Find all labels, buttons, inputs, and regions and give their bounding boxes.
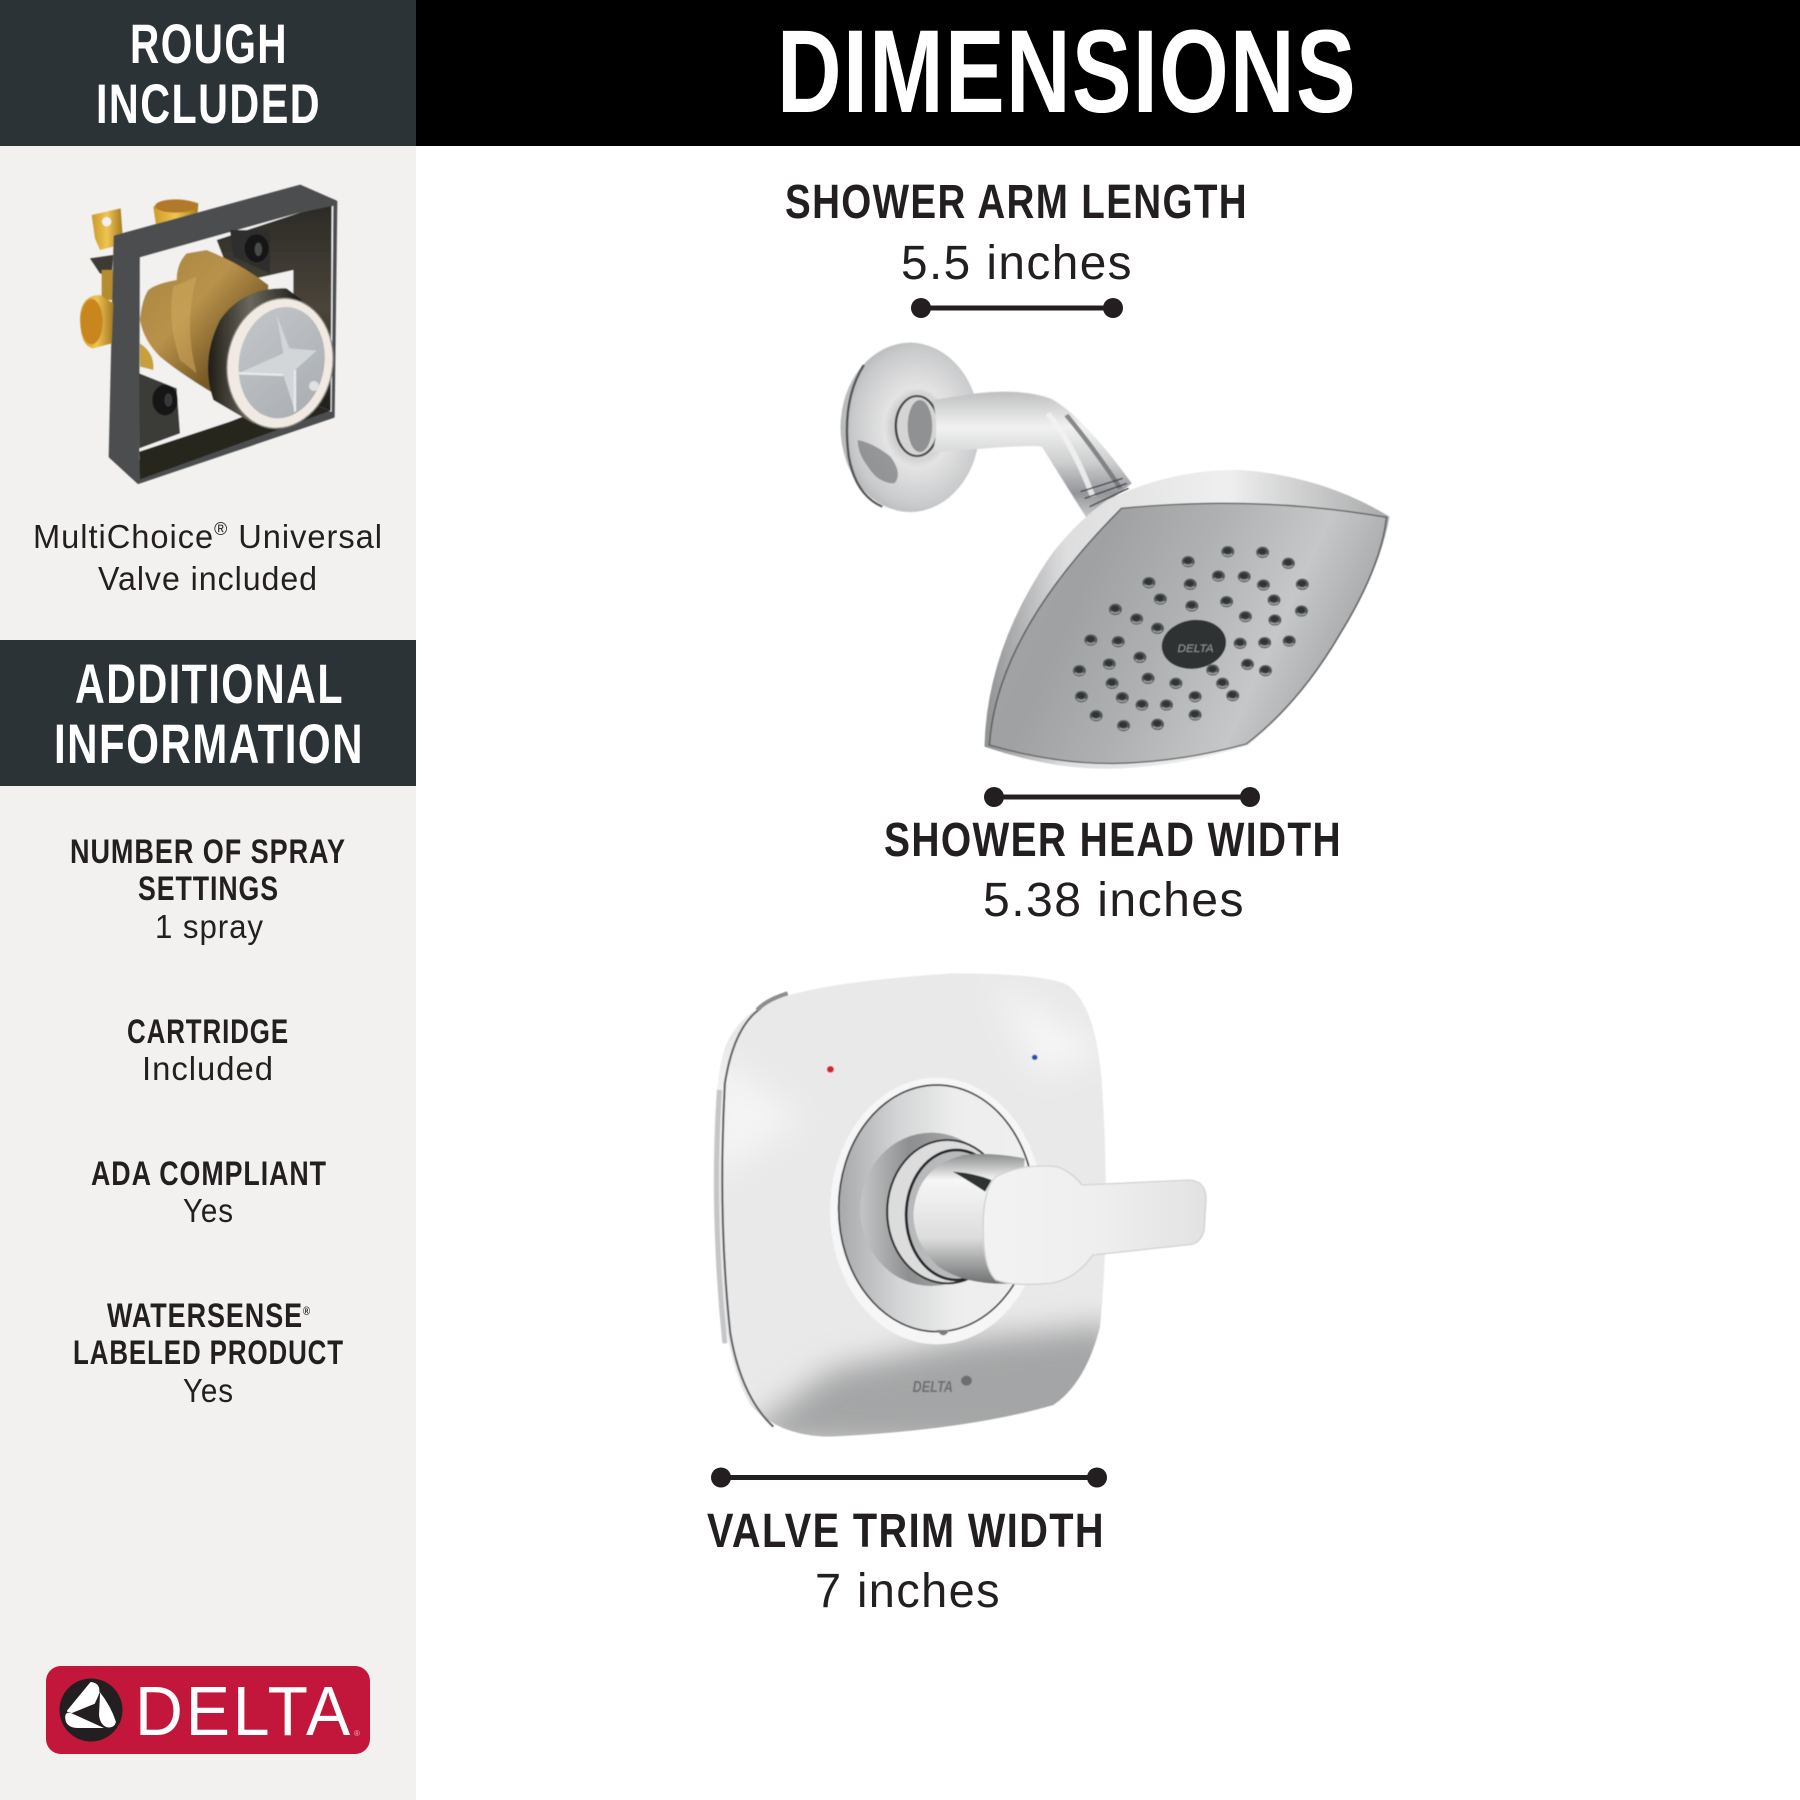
title banner: dimensions xyxy=(416,0,1800,146)
dimension bar: shower arm xyxy=(911,298,1123,318)
measurement: shower arm length: 5.5 inches xyxy=(901,237,1133,290)
arm xyxy=(932,392,1132,518)
brand logo: delta: DELTA xyxy=(135,1672,353,1750)
spec: watersense labeled product: WATERSENSE xyxy=(107,1297,354,1335)
flange xyxy=(841,343,980,512)
heading: additional information: ADDITIONAL xyxy=(75,652,344,715)
measurement: valve trim width: 7 inches xyxy=(815,1565,1001,1618)
brass body xyxy=(140,250,268,393)
spec: watersense labeled product: ® xyxy=(303,1304,311,1318)
spec: watersense labeled product: LABELED PRODUCT xyxy=(73,1334,344,1372)
measurement: shower head width: 5.38 inches xyxy=(983,874,1245,927)
centre badge xyxy=(1152,611,1236,677)
caption: valve included: Valve included xyxy=(98,560,318,597)
spec: number of spray settings: SETTINGS xyxy=(138,870,279,908)
measurement: shower arm length: SHOWER ARM LENGTH xyxy=(785,176,1248,229)
spec: cartridge xyxy=(127,1013,289,1087)
measurement: shower head width xyxy=(884,814,1342,927)
spec: ada compliant xyxy=(91,1155,327,1229)
brand logo: delta: ® xyxy=(354,1729,360,1738)
product photo: shower head and arm xyxy=(841,343,1389,769)
dimension bar: valve trim xyxy=(711,1468,1107,1488)
head body xyxy=(984,470,1389,769)
brand logo: delta xyxy=(46,1666,370,1754)
product photo: rough-in valve xyxy=(80,186,343,483)
trim plate xyxy=(713,973,1106,1437)
measurement: valve trim width: VALVE TRIM WIDTH xyxy=(707,1505,1105,1558)
spec: ada compliant: ADA COMPLIANT xyxy=(91,1155,327,1193)
frame xyxy=(110,186,336,483)
heading: rough included: ROUGH xyxy=(130,12,288,75)
spec: number of spray settings xyxy=(70,833,346,945)
spec: watersense labeled product: Yes xyxy=(183,1372,234,1409)
heading: rough included: INCLUDED xyxy=(96,72,321,135)
left sidebar panel xyxy=(0,0,416,1800)
heading: additional information: INFORMATION xyxy=(54,712,364,775)
centre badge: DELTA xyxy=(1178,642,1214,655)
stem xyxy=(913,1154,1025,1284)
spec: watersense labeled product xyxy=(73,1297,344,1409)
spec: cartridge: CARTRIDGE xyxy=(127,1013,289,1051)
head face xyxy=(989,503,1387,763)
caption: valve included: Universal xyxy=(228,518,383,555)
title banner: dimensions: DIMENSIONS xyxy=(777,6,1357,138)
spec: number of spray settings: 1 spray xyxy=(155,908,264,945)
handle xyxy=(983,1166,1206,1284)
escutcheon ring xyxy=(830,1078,1043,1344)
heading: additional information xyxy=(0,640,416,786)
caption: valve included: MultiChoice xyxy=(33,518,216,555)
heading: rough included xyxy=(0,0,416,146)
measurement: valve trim width xyxy=(707,1505,1105,1618)
spec: number of spray settings: NUMBER OF SPRAY xyxy=(70,833,346,871)
measurement: shower head width: SHOWER HEAD WIDTH xyxy=(884,814,1342,867)
caption: valve included xyxy=(33,518,383,597)
dimension bar: shower head xyxy=(984,787,1260,807)
spec: ada compliant: Yes xyxy=(183,1192,234,1229)
spec: cartridge: Included xyxy=(142,1050,274,1087)
product photo: valve trim plate and handle xyxy=(709,973,1206,1450)
product photo: valve trim plate and handle: DELTA xyxy=(913,1379,953,1396)
caption: valve included: ® xyxy=(214,519,228,539)
measurement: shower arm length xyxy=(785,176,1248,290)
